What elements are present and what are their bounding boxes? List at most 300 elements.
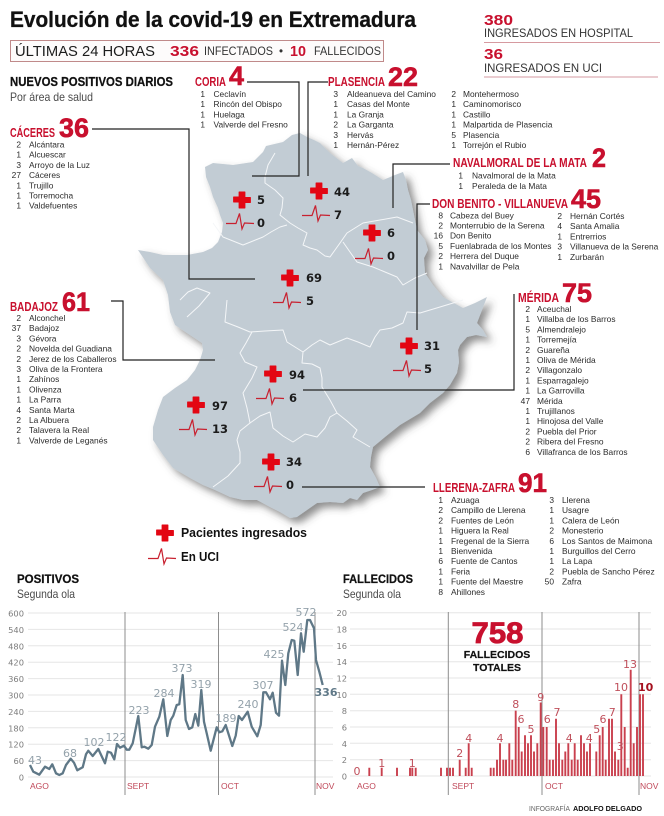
area: Llerena-Zafra: 1 xyxy=(438,566,443,576)
map markers: Llerena: 34 xyxy=(286,455,302,469)
area: Plasencia: Casas del Monte xyxy=(347,99,410,109)
area: Llerena-Zafra: 1 xyxy=(438,546,443,556)
area: Mérida: Hinojosa del Valle xyxy=(537,416,604,426)
area: Plasencia: 3 xyxy=(333,89,338,99)
area: Plasencia: 1 xyxy=(451,109,456,119)
area: Coria: 4 xyxy=(229,61,244,91)
leader line: Don Benito xyxy=(417,204,430,330)
area: Don Benito - Villanueva: Don Benito xyxy=(450,231,492,241)
area: Cáceres: Torremocha xyxy=(29,190,74,200)
area: Llerena-Zafra: 1 xyxy=(438,536,443,546)
leader line: Navalmoral xyxy=(393,164,450,208)
area: Llerena-Zafra: 6 xyxy=(438,556,443,566)
map markers: Badajoz: 13 xyxy=(212,422,228,436)
area: Cáceres: 3 xyxy=(16,160,21,170)
bar chart: deaths: 10 xyxy=(614,681,628,694)
bar chart: deaths: 14 xyxy=(336,657,347,667)
map markers: Plasencia: 44 xyxy=(334,185,350,199)
area: Llerena-Zafra: Ahillones xyxy=(451,587,485,597)
area: Don Benito - Villanueva: Herrera del Duque xyxy=(450,251,519,261)
area: Badajoz: BADAJOZ xyxy=(10,299,58,314)
bar chart: deaths: 2 xyxy=(456,747,463,760)
area: Mérida: Ribera del Fresno xyxy=(537,437,604,447)
area: Llerena-Zafra: Feria xyxy=(451,566,470,576)
area: Badajoz: Alconchel xyxy=(29,313,65,323)
area: Don Benito - Villanueva: Villanueva de la Serena xyxy=(570,242,659,252)
area: Coria: CORIA xyxy=(195,74,226,89)
section heading: new daily positives xyxy=(10,75,173,104)
title: Evolución de la covid-19 en Extremadura xyxy=(10,7,417,32)
area: Mérida: Mérida xyxy=(537,396,563,406)
area: Llerena-Zafra: Fuente de Cantos xyxy=(451,556,518,566)
area: Badajoz: 2 xyxy=(16,313,21,323)
area: Cáceres: Arroyo de la Luz xyxy=(29,160,90,170)
area: Coria: Huelaga xyxy=(214,109,245,119)
area: Don Benito - Villanueva: 2 xyxy=(438,251,443,261)
area: Don Benito - Villanueva: 3 xyxy=(557,242,562,252)
line chart: positives: 43 xyxy=(28,754,42,767)
bar chart: deaths: 0 xyxy=(342,772,347,782)
area: Plasencia: 5 xyxy=(451,130,456,140)
area: Plasencia: 1 xyxy=(451,140,456,150)
line chart: positives: OCT xyxy=(221,781,239,791)
area: Mérida: Villalba de los Barros xyxy=(537,314,616,324)
bar chart: deaths: 6 xyxy=(342,722,347,732)
area: Mérida: 2 xyxy=(525,365,530,375)
area: Coria: Ceclavín xyxy=(214,89,246,99)
stat: hospital admissions xyxy=(484,12,660,42)
area: Llerena-Zafra: Bienvenida xyxy=(451,546,493,556)
area: Don Benito - Villanueva: DON BENITO - VILLANUEVA xyxy=(432,196,568,211)
area: Cáceres: 36 xyxy=(59,113,89,143)
line chart: positives: 480 xyxy=(8,641,24,651)
stat: ICU admissions: INGRESADOS EN UCI xyxy=(484,61,602,75)
bar chart: deaths: 12 xyxy=(336,674,347,684)
area: Mérida: 2 xyxy=(525,345,530,355)
area: Badajoz: Gévora xyxy=(29,333,57,343)
bar chart: deaths: SEPT xyxy=(452,781,474,791)
area: Cáceres: Valdefuentes xyxy=(29,201,77,211)
area: Llerena-Zafra: Higuera la Real xyxy=(451,526,509,536)
heading: positives chart xyxy=(17,572,79,601)
bar chart: deaths: 7 xyxy=(554,706,560,719)
area: Badajoz: 1 xyxy=(16,374,21,384)
area: Badajoz: Novelda del Guadiana xyxy=(29,344,112,354)
bar chart: deaths: 9 xyxy=(537,691,544,704)
map markers: Mérida: 94 xyxy=(289,368,305,382)
line chart: positives: SEPT xyxy=(127,781,149,791)
area: Cáceres: CÁCERES xyxy=(10,125,55,140)
bar chart: deaths: NOV xyxy=(640,781,659,791)
area: Don Benito - Villanueva: 1 xyxy=(557,252,562,262)
area: Badajoz: 61 xyxy=(62,287,90,317)
line chart: positives: 284 xyxy=(154,687,174,700)
area: Badajoz: La Albuera xyxy=(29,415,69,425)
heading: deaths chart: Segunda ola xyxy=(343,587,401,601)
bar chart: deaths: 5 xyxy=(593,723,600,736)
leader line: Plasencia xyxy=(308,82,328,176)
area: Llerena-Zafra xyxy=(433,468,655,597)
leader line: Llerena xyxy=(302,486,425,488)
leader line: Badajoz xyxy=(111,301,215,360)
area: Mérida: 2 xyxy=(525,437,530,447)
area: Badajoz: Jerez de los Caballeros xyxy=(29,354,117,364)
area: Plasencia: Aldeanueva del Camino xyxy=(347,89,436,99)
area: Mérida: 1 xyxy=(525,335,530,345)
area: Mérida: 2 xyxy=(525,304,530,314)
area: Mérida: Guareña xyxy=(537,345,570,355)
area: Cáceres: 1 xyxy=(16,190,21,200)
area: Plasencia: La Garganta xyxy=(347,120,394,130)
last 24 hours box: INFECTADOS xyxy=(204,46,273,58)
bar chart: deaths: 5 xyxy=(528,723,534,736)
area: Plasencia: Castillo xyxy=(463,109,491,119)
area: Badajoz: Badajoz xyxy=(29,323,59,333)
area: Mérida: 5 xyxy=(525,324,530,334)
area: Llerena-Zafra: 1 xyxy=(549,505,554,515)
bar chart: deaths: 18 xyxy=(336,624,347,634)
area: Badajoz: 2 xyxy=(16,425,21,435)
legend xyxy=(148,524,307,564)
area: Don Benito - Villanueva: 5 xyxy=(438,241,443,251)
area: Badajoz: Talavera la Real xyxy=(29,425,89,435)
area: Don Benito - Villanueva: 45 xyxy=(571,184,601,214)
area: Don Benito - Villanueva: Santa Amalia xyxy=(570,221,620,231)
map markers: Cáceres: 69 xyxy=(306,271,322,285)
area: Plasencia: Montehermoso xyxy=(463,89,519,99)
area: Plasencia: Torrejón el Rubio xyxy=(463,140,527,150)
area: Llerena-Zafra: 1 xyxy=(549,515,554,525)
area: Llerena-Zafra: 2 xyxy=(438,505,443,515)
bar chart: deaths: 6 xyxy=(518,713,524,726)
area: Mérida: Puebla del Prior xyxy=(537,426,597,436)
area: Llerena-Zafra: Campillo de Llerena xyxy=(451,505,526,515)
callout: total deaths: TOTALES xyxy=(473,662,521,674)
area: Mérida: 1 xyxy=(525,386,530,396)
legend: En UCI xyxy=(181,549,219,564)
area: Navalmoral de la Mata: 2 xyxy=(592,143,606,173)
area: Mérida: 1 xyxy=(525,355,530,365)
bar chart: deaths: OCT xyxy=(545,781,563,791)
map of Extremadura xyxy=(138,133,487,518)
map markers: Cáceres xyxy=(273,270,322,308)
area: Don Benito - Villanueva: 1 xyxy=(557,231,562,241)
heading: positives chart: Segunda ola xyxy=(17,587,75,601)
section heading: new daily positives: NUEVOS POSITIVOS DIARIOS xyxy=(10,75,173,89)
bar chart: deaths: 7 xyxy=(609,706,616,719)
area: Llerena-Zafra: Burguillos del Cerro xyxy=(562,546,636,556)
line chart: positives: 189 xyxy=(216,712,236,725)
area: Llerena-Zafra: Azuaga xyxy=(451,495,480,505)
area: Plasencia: 1 xyxy=(333,140,338,150)
map markers: Plasencia xyxy=(302,182,350,222)
line chart: positives: 68 xyxy=(63,747,77,760)
area: Mérida: Villagonzalo xyxy=(537,365,582,375)
bar chart: deaths: 3 xyxy=(617,740,624,753)
area: Badajoz xyxy=(10,287,117,445)
area: Llerena-Zafra: Fuente del Maestre xyxy=(451,577,523,587)
area: Coria: 1 xyxy=(200,109,205,119)
area: Don Benito - Villanueva: Cabeza del Buey xyxy=(450,210,515,220)
bar chart: deaths: 4 xyxy=(586,732,593,745)
area: Don Benito - Villanueva: Fuenlabrada de los Montes xyxy=(450,241,552,251)
leader line: Mérida xyxy=(303,294,514,390)
bar chart: deaths: 0 xyxy=(354,765,360,778)
area: Plasencia: Caminomorisco xyxy=(463,99,522,109)
area: Mérida: 2 xyxy=(525,426,530,436)
map markers: Badajoz xyxy=(179,396,228,436)
bar chart: deaths: 2 xyxy=(342,755,347,765)
leader line: Coria xyxy=(247,82,299,176)
line chart: positives: 572 xyxy=(296,606,316,619)
line chart: positives: 600 xyxy=(8,608,24,618)
health area borders xyxy=(180,153,463,487)
map markers: Navalmoral xyxy=(355,224,395,264)
area: Mérida: Almendralejo xyxy=(537,324,586,334)
area: Don Benito - Villanueva: 2 xyxy=(438,220,443,230)
section heading: new daily positives: Por área de salud xyxy=(10,90,93,104)
last 24 hours box: • xyxy=(279,46,283,58)
area: Mérida: Villafranca de los Barros xyxy=(537,447,628,457)
area: Cáceres: 1 xyxy=(16,150,21,160)
region outline xyxy=(138,133,487,518)
area: Llerena-Zafra: 8 xyxy=(438,587,443,597)
line chart: positives: 319 xyxy=(190,678,212,691)
area: Plasencia: PLASENCIA xyxy=(328,74,385,89)
line chart: positives: 60 xyxy=(13,756,24,766)
area: Llerena-Zafra: 2 xyxy=(549,526,554,536)
area: Badajoz: 37 xyxy=(12,323,21,333)
area: Mérida: Oliva de Mérida xyxy=(537,355,596,365)
bar chart: deaths: 10 xyxy=(336,690,347,700)
bar chart: deaths: 4 xyxy=(465,732,472,745)
area: Don Benito - Villanueva: Navalvillar de Pela xyxy=(450,261,520,271)
stat: ICU admissions: 36 xyxy=(484,46,503,63)
area: Llerena-Zafra: 1 xyxy=(549,546,554,556)
area: Llerena-Zafra: LLERENA-ZAFRA xyxy=(433,480,515,495)
area: Don Benito - Villanueva: 4 xyxy=(557,221,562,231)
area: Llerena-Zafra: Usagre xyxy=(562,505,589,515)
area: Cáceres: Alcuescar xyxy=(29,150,66,160)
area: Mérida: La Garrovilla xyxy=(537,386,585,396)
area: Don Benito - Villanueva xyxy=(432,184,659,271)
area: Don Benito - Villanueva: Zurbarán xyxy=(570,252,604,262)
area: Badajoz: Olivenza xyxy=(29,384,62,394)
bar chart: deaths: 10 xyxy=(638,681,654,694)
line chart: positives: 336 xyxy=(315,686,338,699)
area: Plasencia: Hervás xyxy=(347,130,374,140)
area: Badajoz: Zahínos xyxy=(29,374,59,384)
area: Badajoz: La Parra xyxy=(29,395,61,405)
bar chart: deaths: 6 xyxy=(600,713,606,726)
area: Plasencia: 1 xyxy=(451,120,456,130)
area: Mérida: 1 xyxy=(525,416,530,426)
area: Plasencia: Malpartida de Plasencia xyxy=(463,120,553,130)
map markers: Mérida xyxy=(256,366,305,405)
area: Cáceres: 27 xyxy=(12,170,21,180)
area: Llerena-Zafra: 1 xyxy=(438,526,443,536)
area: Mérida: 1 xyxy=(525,314,530,324)
credit xyxy=(529,804,642,813)
area: Cáceres: 1 xyxy=(16,180,21,190)
map markers: Plasencia: 7 xyxy=(334,208,342,222)
area: Mérida: Torremejía xyxy=(537,335,577,345)
area: Cáceres: 2 xyxy=(16,140,21,150)
area: Badajoz: 1 xyxy=(16,384,21,394)
area: Mérida: MÉRIDA xyxy=(518,290,559,305)
area: Badajoz: 1 xyxy=(16,435,21,445)
stat: hospital admissions: 380 xyxy=(484,12,513,29)
line chart: positives: 307 xyxy=(252,679,274,692)
bar chart: deaths: 6 xyxy=(544,713,551,726)
area: Cáceres xyxy=(10,113,90,211)
area: Llerena-Zafra: Los Santos de Maimona xyxy=(562,536,653,546)
area: Plasencia: 1 xyxy=(451,99,456,109)
area: Plasencia: 2 xyxy=(451,89,456,99)
area: Badajoz: Valverde de Leganés xyxy=(29,435,108,445)
line chart: positives: AGO xyxy=(30,781,49,791)
area: Coria xyxy=(195,61,288,130)
area: Mérida: Esparragalejo xyxy=(537,375,589,385)
area: Cáceres: Alcántara xyxy=(29,140,65,150)
area: Mérida: Aceuchal xyxy=(537,304,572,314)
area: Llerena-Zafra: Zafra xyxy=(562,577,582,587)
bar chart: deaths: 8 xyxy=(512,698,519,711)
bar chart: deaths: AGO xyxy=(357,781,376,791)
stat: hospital admissions: INGRESADOS EN HOSPITAL xyxy=(484,26,633,40)
area: Badajoz: 1 xyxy=(16,395,21,405)
map markers: Mérida: 6 xyxy=(289,391,297,405)
area: Llerena-Zafra: 1 xyxy=(438,495,443,505)
bar chart: deaths xyxy=(336,608,659,795)
area: Llerena-Zafra: 2 xyxy=(438,515,443,525)
map markers: Llerena: 0 xyxy=(286,478,294,492)
area: Mérida: 1 xyxy=(525,375,530,385)
last 24 hours box: ÚLTIMAS 24 HORAS xyxy=(15,43,155,60)
bar chart: deaths: 4 xyxy=(496,732,504,745)
line chart: positives: 420 xyxy=(8,658,24,668)
area: Mérida: 75 xyxy=(562,278,592,308)
last 24 hours box: FALLECIDOS xyxy=(314,46,381,58)
bar chart: deaths: 8 xyxy=(342,706,347,716)
area: Llerena-Zafra: 50 xyxy=(545,577,554,587)
area: Mérida: Trujillanos xyxy=(537,406,575,416)
area: Coria: 1 xyxy=(200,120,205,130)
last 24 hours box xyxy=(10,40,384,62)
area: Don Benito - Villanueva: Monterrubio de la Serena xyxy=(450,220,545,230)
area: Badajoz: 2 xyxy=(16,354,21,364)
area: Plasencia: 1 xyxy=(333,109,338,119)
area: Plasencia: 2 xyxy=(333,120,338,130)
line chart: positives: NOV xyxy=(316,781,335,791)
area: Navalmoral de la Mata: 1 xyxy=(458,170,463,180)
line chart: positives: 300 xyxy=(8,690,24,700)
line chart: positives: 0 xyxy=(19,772,24,782)
map markers: Coria xyxy=(226,192,265,230)
area: Badajoz: 4 xyxy=(16,405,21,415)
legend: Pacientes ingresados xyxy=(181,525,307,540)
area: Badajoz: 3 xyxy=(16,364,21,374)
area: Llerena-Zafra: 1 xyxy=(438,577,443,587)
map markers: Coria: 0 xyxy=(257,216,265,230)
area: Badajoz: Santa Marta xyxy=(29,405,75,415)
area: Llerena-Zafra: 3 xyxy=(549,495,554,505)
map markers: Navalmoral: 0 xyxy=(387,249,395,263)
area: Llerena-Zafra: Puebla de Sancho Pérez xyxy=(562,566,655,576)
area: Don Benito - Villanueva: 1 xyxy=(438,261,443,271)
callout: total deaths xyxy=(464,617,530,674)
map markers: Coria: 5 xyxy=(257,193,265,207)
heading: positives chart: POSITIVOS xyxy=(17,572,79,586)
bar chart: deaths: 1 xyxy=(409,757,416,770)
bar chart: deaths: 20 xyxy=(336,608,347,618)
bar chart: deaths: 16 xyxy=(336,641,347,651)
map markers: Navalmoral: 6 xyxy=(387,226,395,240)
area: Llerena-Zafra: 2 xyxy=(549,566,554,576)
area: Navalmoral de la Mata: Peraleda de la Mata xyxy=(472,181,547,191)
line chart: positives: 223 xyxy=(128,704,150,717)
area: Llerena-Zafra: Fregenal de la Sierra xyxy=(451,536,530,546)
leader line: Cáceres xyxy=(92,129,255,279)
line chart: positives: 120 xyxy=(8,740,24,750)
area: Navalmoral de la Mata: NAVALMORAL DE LA MATA xyxy=(453,155,587,170)
area: Coria: Valverde del Fresno xyxy=(214,120,288,130)
callout: total deaths: 758 xyxy=(472,617,524,650)
line chart: positives: 240 xyxy=(238,698,258,711)
bar chart: deaths: 4 xyxy=(342,739,347,749)
area: Llerena-Zafra: 91 xyxy=(518,468,547,498)
area: Llerena-Zafra: Calera de León xyxy=(562,515,620,525)
area: Coria: Rincón del Obispo xyxy=(214,99,282,109)
line chart: positives: 102 xyxy=(84,736,104,749)
last 24 hours box: 10 xyxy=(290,43,306,60)
heading: deaths chart xyxy=(343,572,413,601)
area: Plasencia xyxy=(328,62,553,150)
area: Navalmoral de la Mata: Navalmoral de la Mata xyxy=(472,170,556,180)
area: Badajoz: Oliva de la Frontera xyxy=(29,364,103,374)
line chart: positives: 425 xyxy=(264,648,284,661)
map markers: Don Benito: 31 xyxy=(424,339,440,353)
line chart: positives: 373 xyxy=(172,662,192,675)
area: Mérida: 6 xyxy=(525,447,530,457)
area: Plasencia: 22 xyxy=(388,62,418,92)
line chart: positives: 524 xyxy=(282,621,304,634)
area: Llerena-Zafra: Llerena xyxy=(562,495,590,505)
line chart: positives xyxy=(8,606,338,795)
area: Badajoz: 2 xyxy=(16,344,21,354)
area: Plasencia: 1 xyxy=(333,99,338,109)
area: Plasencia: Hernán-Pérez xyxy=(347,140,399,150)
credit: INFOGRAFÍA xyxy=(529,804,570,813)
map markers: Llerena xyxy=(254,454,302,492)
area: Llerena-Zafra: Monesterio xyxy=(562,526,604,536)
area: Mérida: 47 xyxy=(521,396,530,406)
area: Llerena-Zafra: 6 xyxy=(549,536,554,546)
area: Plasencia: 3 xyxy=(333,130,338,140)
line chart: positives: 360 xyxy=(8,674,24,684)
area: Coria: 1 xyxy=(200,89,205,99)
area: Cáceres: Trujillo xyxy=(29,180,54,190)
area: Mérida xyxy=(518,278,628,457)
area: Badajoz: 2 xyxy=(16,415,21,425)
area: Navalmoral de la Mata: 1 xyxy=(458,181,463,191)
area: Don Benito - Villanueva: Hernán Cortés xyxy=(570,211,624,221)
area: Llerena-Zafra: 1 xyxy=(549,556,554,566)
area: Badajoz: 3 xyxy=(16,333,21,343)
area: Don Benito - Villanueva: 8 xyxy=(438,210,443,220)
heading: deaths chart: FALLECIDOS xyxy=(343,572,413,586)
map markers: Cáceres: 5 xyxy=(306,294,314,308)
